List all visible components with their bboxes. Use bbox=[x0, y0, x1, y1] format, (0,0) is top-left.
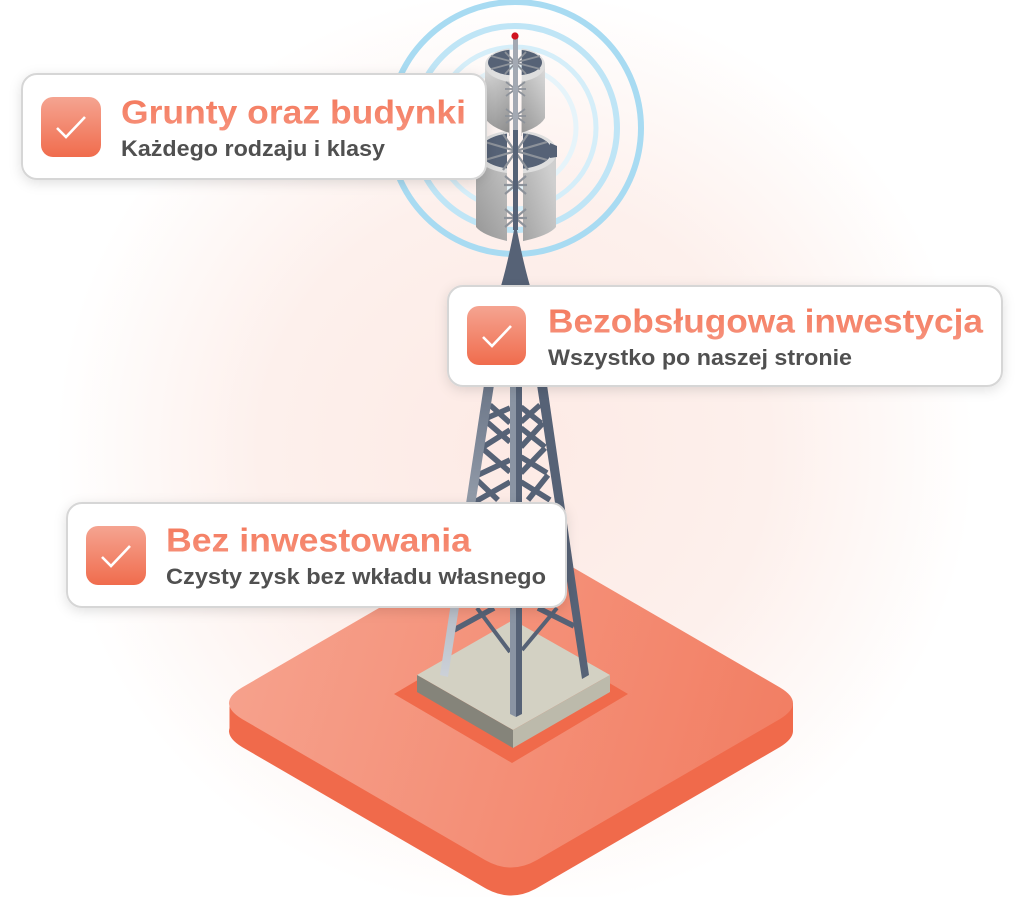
upper antenna drum bbox=[485, 48, 545, 136]
card: Bezobsługowa inwestycja bbox=[448, 286, 1002, 386]
icon: check bbox=[467, 306, 526, 365]
signal rings bbox=[389, 2, 641, 254]
icon: check bbox=[41, 97, 101, 157]
tower bbox=[440, 385, 589, 717]
subtitle: Wszystko po naszej stronie bbox=[548, 345, 852, 370]
bracing bbox=[454, 405, 574, 652]
concrete base bbox=[417, 620, 610, 748]
heading: Bezobsługowa inwestycja bbox=[548, 302, 984, 340]
mast top with beacon bbox=[511, 32, 519, 230]
platform inset bbox=[394, 625, 628, 763]
card: Bez inwestowania bbox=[67, 503, 566, 607]
left leg bbox=[440, 385, 494, 677]
tower neck bbox=[501, 222, 530, 286]
lower antenna drum bbox=[475, 130, 557, 244]
subtitle: Czysty zysk bez wkładu własnego bbox=[166, 564, 546, 589]
subtitle: Każdego rodzaju i klasy bbox=[121, 136, 385, 161]
heading: Bez inwestowania bbox=[166, 522, 472, 558]
icon: check bbox=[86, 526, 146, 585]
upper hubs bbox=[491, 52, 540, 123]
isometric platform bbox=[229, 532, 793, 896]
card: Grunty oraz budynki bbox=[22, 74, 486, 179]
centre mast bbox=[510, 385, 516, 717]
lower hubs bbox=[485, 134, 547, 227]
right leg bbox=[537, 385, 589, 679]
heading: Grunty oraz budynki bbox=[121, 94, 466, 130]
